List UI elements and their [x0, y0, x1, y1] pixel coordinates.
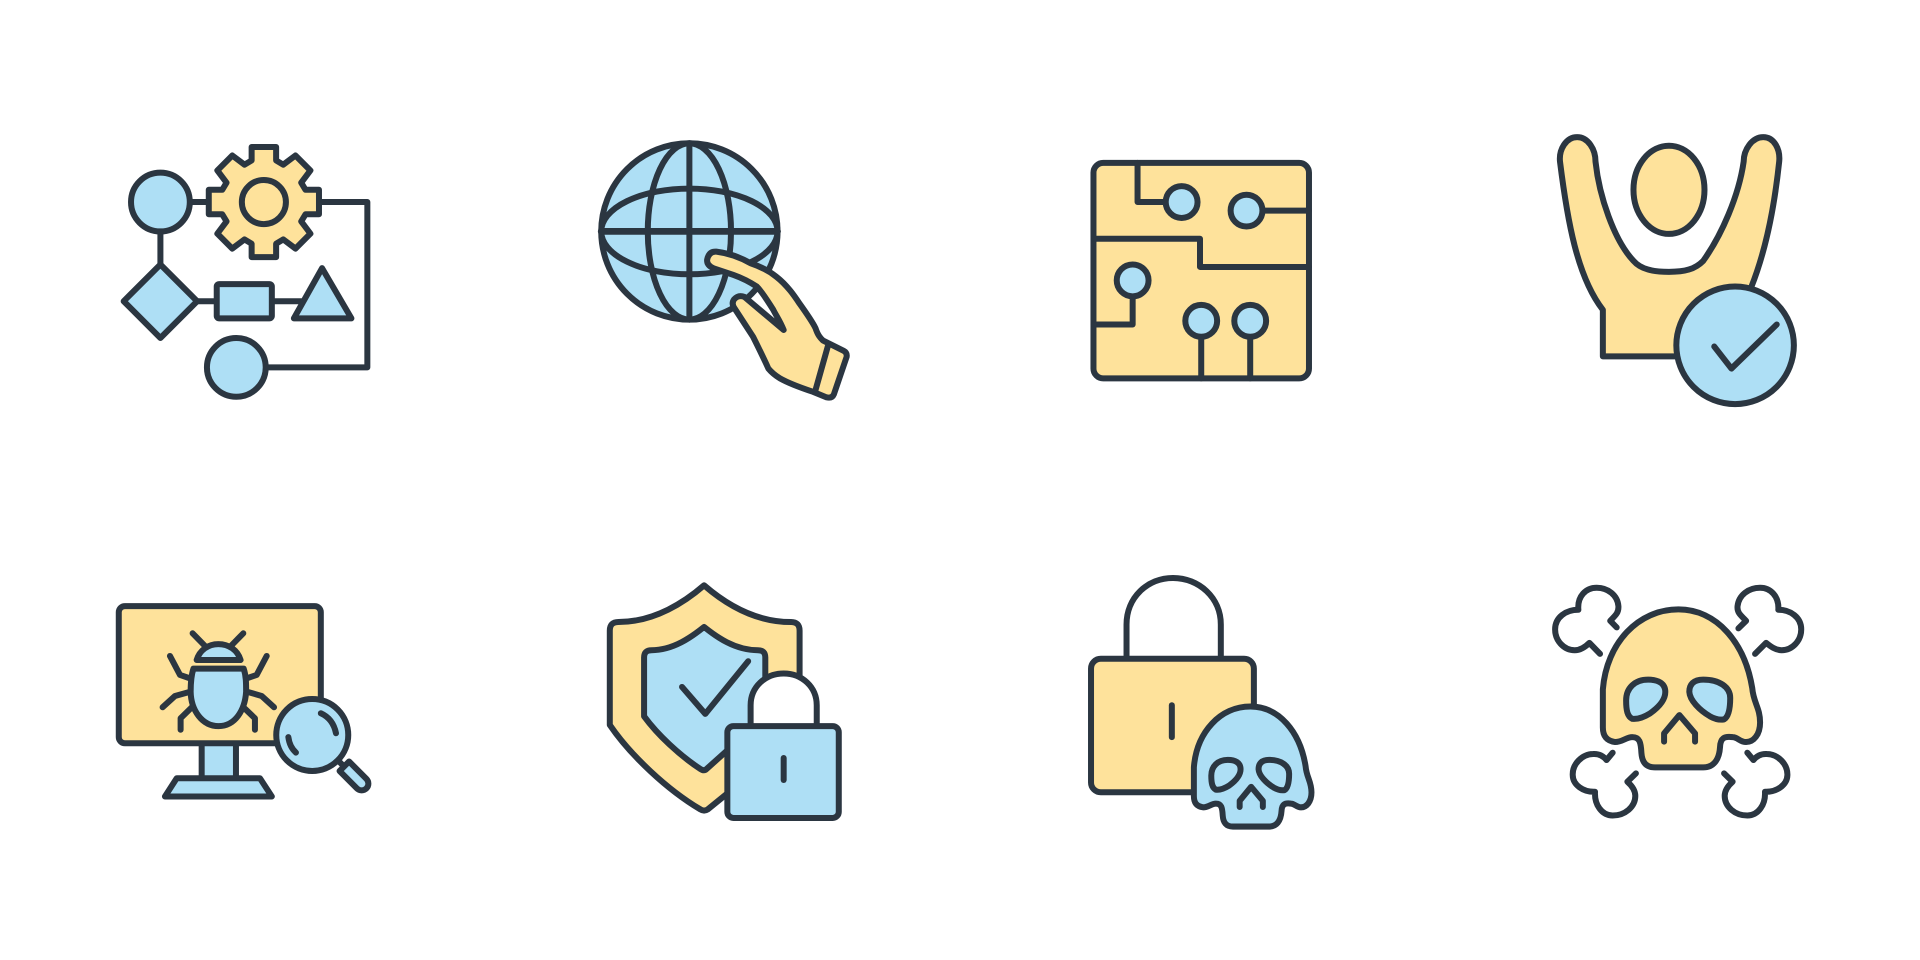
globe	[601, 143, 778, 320]
icon: skull and crossbones	[1555, 588, 1801, 816]
icon: padlock with skull	[1091, 578, 1311, 827]
circuit traces	[1093, 163, 1309, 378]
padlock shackle	[1127, 578, 1221, 661]
padlock body	[727, 726, 839, 818]
hand	[707, 252, 847, 398]
bottom bones	[1573, 753, 1787, 816]
small skull	[1194, 707, 1311, 827]
magnifier lens	[276, 699, 348, 771]
icon: hand touching globe	[601, 143, 847, 398]
icon: flowchart with gear	[124, 147, 367, 397]
padlock body	[1091, 659, 1254, 792]
flowchart end circle	[207, 338, 266, 397]
monitor screen	[119, 606, 321, 743]
check mark	[1714, 324, 1777, 369]
large skull eyes	[1626, 680, 1730, 720]
padlock shackle	[751, 673, 817, 729]
circuit nodes	[1117, 186, 1266, 337]
monitor base	[165, 778, 272, 797]
icon: monitor with bug and magnifier	[119, 606, 371, 797]
icon: person with raised arms and check badge	[1560, 137, 1794, 404]
shield check mark	[682, 661, 748, 714]
small skull eyes	[1211, 760, 1289, 790]
monitor stand	[202, 742, 236, 779]
bug	[163, 633, 274, 730]
flowchart triangle	[294, 268, 351, 318]
hand cuff line	[815, 347, 828, 392]
keyhole	[1169, 705, 1174, 737]
icon: circuit board	[1093, 163, 1309, 378]
large skull	[1603, 609, 1760, 767]
flowchart gear	[209, 147, 319, 257]
flowchart start circle	[131, 173, 190, 231]
top bones	[1555, 588, 1801, 654]
large skull nose	[1664, 715, 1695, 742]
outer shield	[610, 585, 800, 811]
flowchart diamond	[124, 264, 197, 338]
board	[1093, 163, 1309, 378]
check badge	[1676, 287, 1794, 404]
keyhole	[781, 758, 786, 780]
lens highlights	[288, 713, 336, 753]
small skull nose	[1240, 787, 1263, 807]
magnifier handle	[337, 759, 371, 793]
icon: shield with padlock	[610, 585, 839, 818]
flowchart rectangle	[217, 284, 272, 318]
person head	[1633, 146, 1704, 234]
inner shield	[644, 627, 765, 770]
person body	[1560, 137, 1779, 356]
small skull head	[1194, 707, 1311, 827]
